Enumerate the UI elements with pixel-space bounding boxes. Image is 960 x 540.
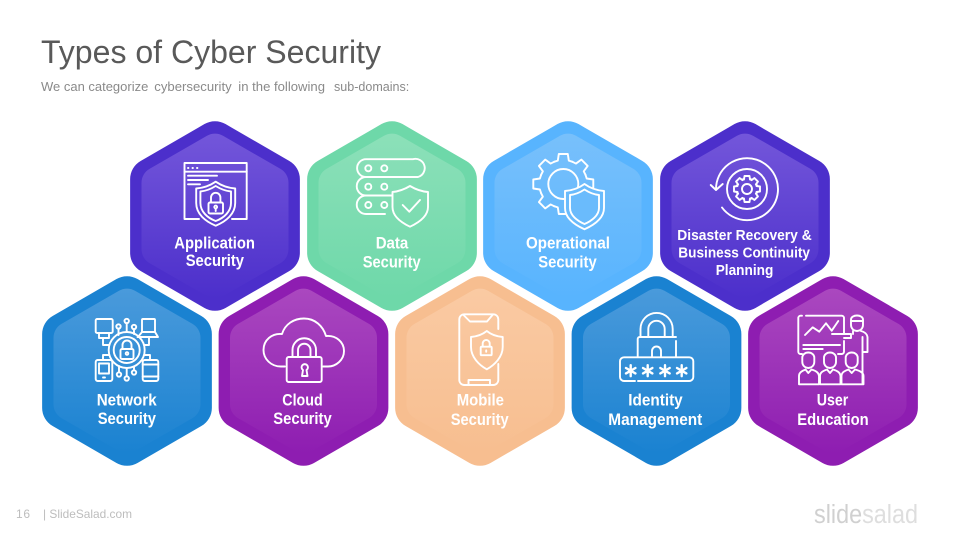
panel: user education: [748, 276, 918, 466]
icon: network lock: [96, 319, 158, 381]
subtitle: cybersecurity: [154, 80, 232, 94]
panel: mobile security: [395, 276, 565, 466]
label: Security: [451, 411, 509, 429]
label: User: [817, 392, 849, 410]
label: Security: [98, 410, 157, 428]
label: Management: [608, 411, 703, 429]
icon: browser window with shield lock: [184, 163, 247, 226]
icon: cloud lock: [264, 318, 344, 382]
label: [273, 392, 332, 428]
label: [677, 228, 812, 279]
footer source: | SlideSalad.com: [43, 507, 132, 521]
hexagon: [483, 121, 653, 311]
icon: password asterisks: [626, 365, 686, 376]
panel: application security: [130, 121, 300, 311]
label: Planning: [716, 263, 773, 279]
panel: cloud security: [219, 276, 388, 466]
hexagon: [219, 276, 388, 466]
title: Types of Cyber Security: [41, 34, 381, 70]
label: Education: [797, 411, 869, 429]
label: Data: [376, 234, 409, 252]
icon: padlock with password: [620, 313, 693, 381]
label: [174, 234, 255, 270]
label: Network: [97, 392, 157, 410]
hexagon: [307, 121, 477, 311]
subtitle: [41, 80, 409, 94]
label: Operational: [526, 234, 610, 252]
panel: disaster recovery: [660, 121, 830, 311]
panel: network security: [42, 276, 212, 466]
label: [363, 234, 421, 271]
hexagon: [42, 276, 212, 466]
label: Identity: [628, 392, 683, 410]
page number: 16: [16, 507, 30, 521]
label: [797, 392, 869, 429]
subtitle: We can categorize: [41, 80, 148, 94]
hexagon: [395, 276, 565, 466]
label: Cloud: [282, 392, 323, 410]
icon: servers with shield check: [357, 159, 428, 227]
label: [97, 392, 157, 428]
panel: data security: [307, 121, 477, 311]
label: Disaster Recovery &: [677, 228, 812, 244]
label: Security: [363, 253, 421, 271]
icon: phone with shield: [459, 314, 503, 385]
label: Application: [174, 234, 255, 252]
hexagon: [660, 121, 830, 311]
label: [608, 392, 703, 429]
label: Business Continuity: [678, 246, 810, 262]
hexagon: [130, 121, 300, 311]
icon: gear with shield: [533, 154, 604, 229]
icon: presenter and audience: [798, 316, 868, 384]
hexagon: [748, 276, 918, 466]
label: Security: [186, 252, 245, 270]
label: Security: [538, 253, 597, 271]
panel: operational security: [483, 121, 653, 311]
label: [451, 392, 509, 429]
subtitle: sub-domains:: [334, 80, 409, 94]
label: Mobile: [457, 392, 504, 410]
label: [526, 234, 610, 271]
label: Security: [273, 410, 332, 428]
hexagon: [572, 276, 741, 466]
logo: slidesalad: slidesalad: [814, 501, 918, 529]
icon: recovery arrow with gear: [711, 158, 778, 220]
panel: identity management: [572, 276, 741, 466]
subtitle: in the following: [238, 80, 325, 94]
